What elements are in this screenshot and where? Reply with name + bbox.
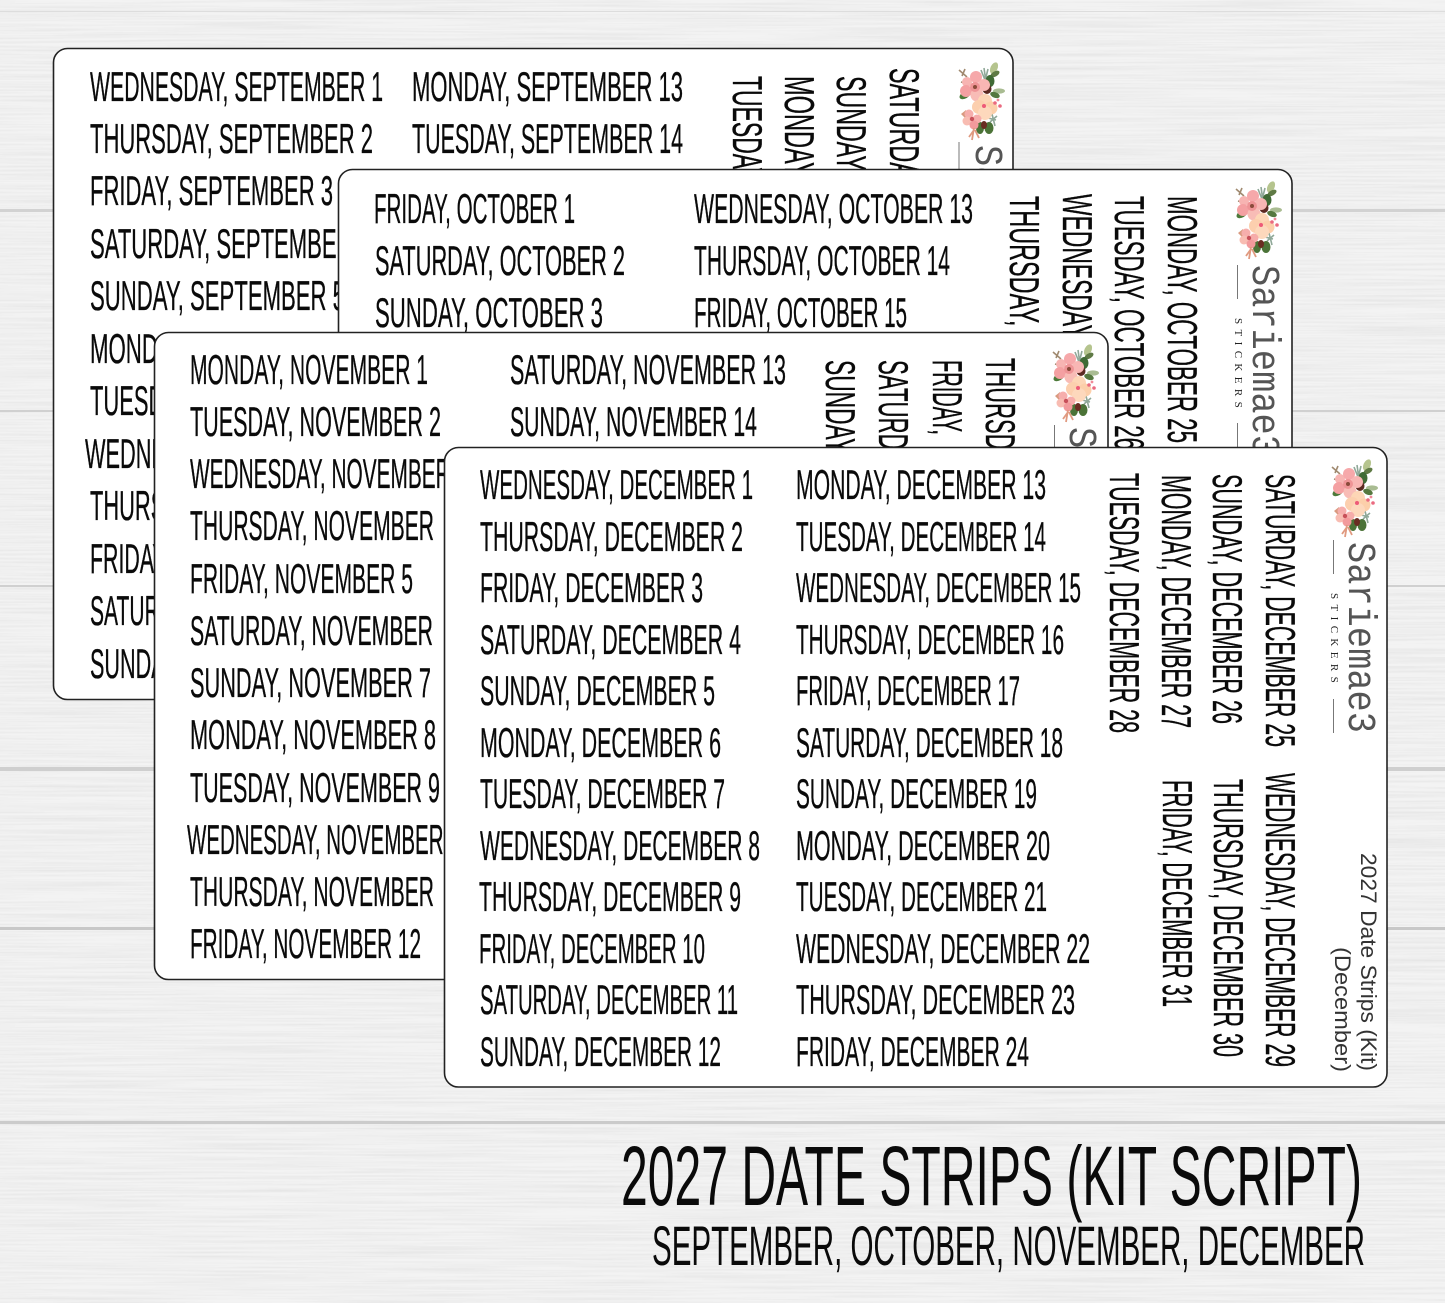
September vertical strips: MONDAY, SEPTEMBER 27: [776, 76, 823, 366]
October dates, second column: THURSDAY, OCTOBER 14: [694, 237, 950, 284]
October dates, first column: FRIDAY, OCTOBER 1: [374, 185, 575, 232]
September dates, first column: FRIDAY, SEPTEMBER 10: [90, 535, 337, 582]
panel: September sheet: [54, 48, 1013, 700]
September dates, second column: [412, 63, 683, 162]
September vertical strips: [724, 68, 928, 378]
September dates, first column: WEDNESDAY, SEPTEMBER 8: [85, 430, 385, 477]
December dates, first column: FRIDAY, DECEMBER 3: [480, 564, 703, 611]
December vertical strips, upper: SUNDAY, DECEMBER 26: [1204, 474, 1251, 724]
December dates, second column: SUNDAY, DECEMBER 19: [796, 770, 1037, 817]
panel: December sheet: [444, 448, 1387, 1087]
December dates, second column: WEDNESDAY, DECEMBER 22: [796, 925, 1090, 972]
icon: floral logo: [1052, 343, 1099, 422]
December dates, first column: SUNDAY, DECEMBER 12: [480, 1028, 721, 1075]
November dates, second column: [510, 346, 786, 445]
December dates, first column: THURSDAY, DECEMBER 2: [480, 513, 743, 560]
September vertical strips: SATURDAY, SEPTEMBER 25: [881, 68, 928, 378]
sheet label: [1330, 853, 1381, 1072]
December dates, first column: SATURDAY, DECEMBER 4: [480, 616, 741, 663]
October dates, second column: [694, 185, 973, 336]
October vertical strips: [1001, 194, 1206, 494]
December dates, first column: WEDNESDAY, DECEMBER 1: [480, 461, 753, 508]
November vertical strips: SUNDAY, NOVEMBER 28: [817, 360, 864, 625]
December vertical strips, upper: SATURDAY, DECEMBER 25: [1257, 474, 1304, 747]
December dates, first column: SUNDAY, DECEMBER 5: [480, 667, 715, 714]
December vertical strips, upper: MONDAY, DECEMBER 27: [1153, 475, 1200, 728]
September dates, first column: WEDNESDAY, SEPTEMBER 1: [90, 63, 383, 110]
November vertical strips: THURSDAY, NOVEMBER 25: [977, 358, 1024, 643]
panel: October sheet: [338, 170, 1292, 820]
December vertical strips, upper: [1101, 473, 1304, 747]
December dates, second column: MONDAY, DECEMBER 13: [796, 461, 1046, 508]
December dates, second column: TUESDAY, DECEMBER 14: [796, 513, 1046, 560]
sheet label: (December): [1330, 947, 1355, 1072]
September dates, first column: MONDAY, SEPTEMBER 6: [90, 325, 351, 372]
September dates, first column: [85, 63, 385, 687]
December dates, first column: [479, 461, 760, 1075]
December vertical strips, lower: FRIDAY, DECEMBER 31: [1154, 780, 1201, 1007]
November dates, first column: TUESDAY, NOVEMBER 9: [190, 764, 440, 811]
November vertical strips: SATURDAY, NOVEMBER 27: [870, 360, 917, 645]
September dates, first column: TUESDAY, SEPTEMBER 7: [90, 377, 355, 424]
November dates, first column: THURSDAY, NOVEMBER: [190, 868, 434, 915]
December dates, first column: THURSDAY, DECEMBER 9: [479, 873, 741, 920]
September dates, first column: THURSDAY, SEPTEMBER 9: [90, 482, 371, 529]
December dates, second column: TUESDAY, DECEMBER 21: [796, 873, 1047, 920]
September vertical strips: SUNDAY, SEPTEMBER 26: [828, 76, 875, 356]
December vertical strips, lower: [1154, 773, 1304, 1067]
logo wordmark: Sariemae3: [1336, 542, 1381, 733]
November dates, first column: THURSDAY, NOVEMBER: [190, 502, 434, 549]
November dates, first column: SATURDAY, NOVEMBER: [190, 607, 433, 654]
panel: November sheet: [154, 332, 1108, 980]
December dates, second column: FRIDAY, DECEMBER 17: [796, 667, 1020, 714]
logo wordmark: Sariemae3: [1240, 265, 1285, 456]
December dates, second column: THURSDAY, DECEMBER 23: [796, 976, 1075, 1023]
October dates, second column: WEDNESDAY, OCTOBER 13: [694, 185, 973, 232]
November dates, first column: MONDAY, NOVEMBER 1: [190, 346, 428, 393]
October dates, first column: SUNDAY, OCTOBER 3: [375, 289, 603, 336]
panel: November sheet: WEDNESDAY, NOVEMBER 10: [187, 816, 472, 863]
September dates, second column: TUESDAY, SEPTEMBER 14: [412, 115, 683, 162]
November dates, first column: [187, 346, 472, 967]
December dates, second column: SATURDAY, DECEMBER 18: [796, 719, 1063, 766]
December dates, second column: [796, 461, 1090, 1075]
December dates, first column: MONDAY, DECEMBER 6: [480, 719, 721, 766]
November vertical strips: FRIDAY,: [924, 360, 971, 435]
logo wordmark: STICKERS: [1328, 593, 1340, 688]
October vertical strips: TUESDAY, OCTOBER 26: [1106, 196, 1153, 450]
November dates, second column: SATURDAY, NOVEMBER 13: [510, 346, 786, 393]
October dates, first column: [374, 185, 625, 336]
October vertical strips: MONDAY, OCTOBER 25: [1159, 196, 1206, 443]
October vertical strips: WEDNESDAY, OCTOBER 27: [1054, 194, 1101, 494]
sheet label: 2027 Date Strips (Kit): [1356, 853, 1381, 1071]
October dates, second column: FRIDAY, OCTOBER 15: [694, 289, 907, 336]
November dates, first column: FRIDAY, NOVEMBER 12: [190, 920, 421, 967]
icon: floral logo: [1331, 458, 1378, 537]
December vertical strips, upper: TUESDAY, DECEMBER 28: [1101, 473, 1148, 733]
November vertical strips: [817, 358, 1024, 645]
September dates, first column: SUNDAY, SEPTEMBER 5: [90, 272, 345, 319]
September dates, first column: SATURDAY, SEPTEMBER 4: [90, 220, 371, 267]
logo wordmark: Sariemae3: [1057, 427, 1102, 618]
November dates, first column: FRIDAY, NOVEMBER 5: [190, 555, 413, 602]
December dates, first column: WEDNESDAY, DECEMBER 8: [480, 822, 760, 869]
December dates, first column: TUESDAY, DECEMBER 7: [480, 770, 725, 817]
December dates, second column: THURSDAY, DECEMBER 16: [796, 616, 1064, 663]
December dates, first column: FRIDAY, DECEMBER 10: [479, 925, 705, 972]
logo wordmark: STICKERS: [1232, 318, 1244, 413]
September dates, first column: THURSDAY, SEPTEMBER 2: [90, 115, 373, 162]
December dates, first column: SATURDAY, DECEMBER 11: [480, 976, 738, 1023]
September dates, first column: FRIDAY, SEPTEMBER 3: [90, 167, 333, 214]
October dates, first column: SATURDAY, OCTOBER 2: [375, 237, 625, 284]
November dates, first column: WEDNESDAY, NOVEMBER 3: [190, 450, 468, 497]
icon: floral logo: [1235, 180, 1282, 259]
December dates, second column: FRIDAY, DECEMBER 24: [796, 1028, 1029, 1075]
October vertical strips: THURSDAY, OCTOBER 28: [1001, 196, 1048, 481]
November dates, first column: MONDAY, NOVEMBER 8: [190, 711, 436, 758]
November dates, second column: SUNDAY, NOVEMBER 14: [510, 398, 757, 445]
November dates, first column: SUNDAY, NOVEMBER 7: [190, 659, 431, 706]
September dates, second column: MONDAY, SEPTEMBER 13: [412, 63, 683, 110]
December dates, second column: WEDNESDAY, DECEMBER 15: [796, 564, 1081, 611]
logo wordmark: Sariemae3: [963, 145, 1008, 336]
icon: floral logo: [958, 61, 1005, 140]
November dates, first column: TUESDAY, NOVEMBER 2: [190, 398, 441, 445]
December dates, second column: MONDAY, DECEMBER 20: [796, 822, 1050, 869]
September vertical strips: TUESDAY, SEPTEMBER 28: [724, 76, 771, 366]
September dates, first column: SATURDAY, SEPTEMBER 11: [90, 587, 368, 634]
September dates, first column: SUNDAY, SEPTEMBER 12: [90, 640, 351, 687]
